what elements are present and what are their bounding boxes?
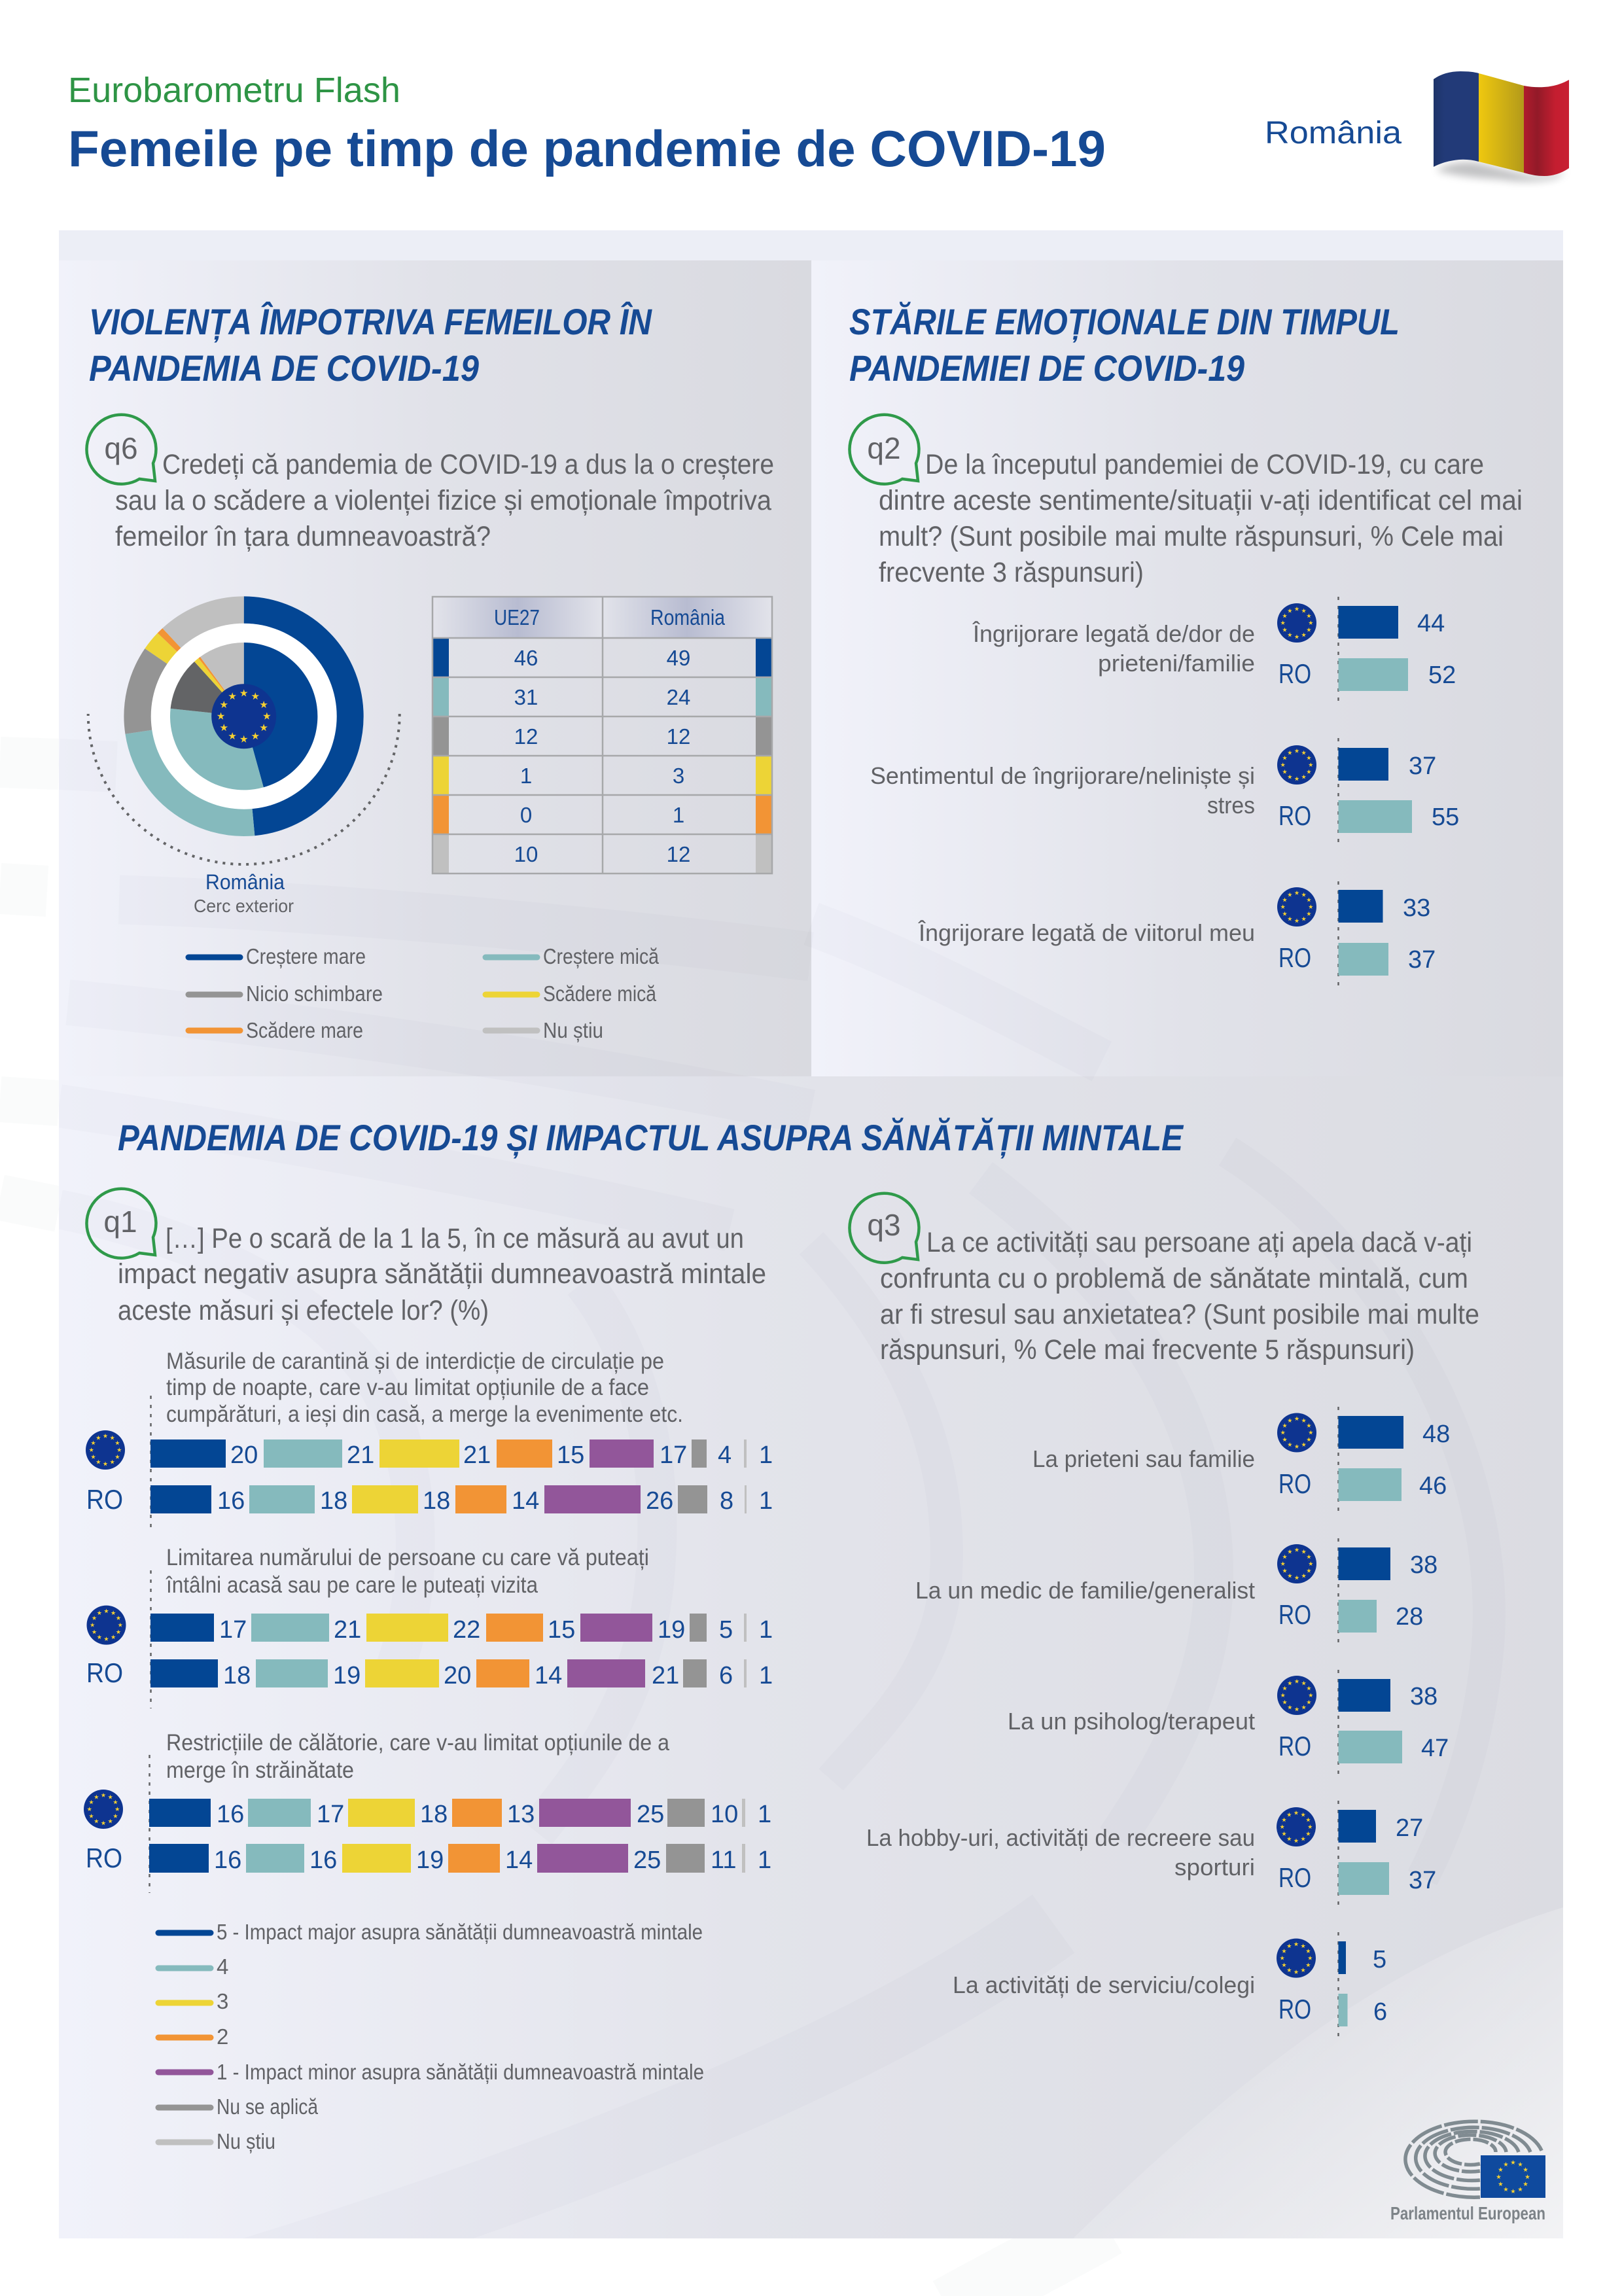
stacked bars: quarantine: 1: [759, 1441, 773, 1469]
data table: 24: [667, 685, 690, 709]
panel background: violence: [59, 260, 811, 1076]
stacked bars: limited visitors: 19: [658, 1616, 685, 1644]
stacked bars: quarantine: [86, 1349, 773, 1533]
legend: q1: Nu știu: [217, 2129, 275, 2153]
bar chart: hobbies: sporturi: [1174, 1854, 1255, 1881]
data table: UE27: [494, 605, 540, 629]
icon: q2 bubble: [849, 415, 919, 484]
question q3: confrunta cu o problemă de sănătate mintală, cum: [880, 1263, 1468, 1294]
data table: [432, 597, 772, 874]
heading: emotional states: [849, 301, 1400, 389]
data table: 12: [667, 724, 690, 749]
bar chart: hobbies: La hobby-uri, activități de recreere sau: [866, 1824, 1255, 1851]
bar chart: hobbies: RO: [1278, 1862, 1311, 1893]
legend: q6: Creștere mică: [543, 944, 660, 968]
stacked bars: travel restrictions: 1: [758, 1846, 771, 1874]
bar chart: q2 item 1: Îngrijorare legată de/dor de: [972, 620, 1255, 647]
icon: q3 bubble: [849, 1193, 919, 1263]
stacked bars: travel restrictions: 1: [758, 1801, 771, 1828]
bar chart: family doctor: 38: [1410, 1551, 1437, 1579]
bar chart: hobbies: 27: [1396, 1814, 1423, 1842]
panel: emotional states: [849, 301, 1523, 987]
question q6: [115, 449, 774, 552]
country name: România: [1265, 116, 1402, 150]
stacked bars: quarantine: 1: [759, 1487, 773, 1515]
panel background: mental health: [59, 1076, 1563, 2238]
data table: 49: [667, 646, 690, 670]
icon: EU flag centre: [211, 684, 276, 749]
bar chart: family doctor: RO: [1278, 1599, 1311, 1630]
main title: Femeile pe timp de pandemie de COVID-19: [68, 120, 1106, 177]
outer ring: România: [137, 610, 350, 822]
bar chart: work: [953, 1932, 1387, 2038]
stacked bars: quarantine: 18: [423, 1487, 450, 1515]
stacked bars: limited visitors: 17: [219, 1616, 247, 1644]
stacked bars: quarantine: 26: [646, 1487, 673, 1515]
stacked bars: limited visitors: 18: [223, 1662, 251, 1689]
bar chart: q2 item 1: 44: [1417, 610, 1445, 637]
bar chart: friends or family: La prieteni sau familie: [1032, 1445, 1255, 1472]
stacked bars: travel restrictions: [84, 1730, 771, 1893]
icon: q2 bubble: q2: [867, 431, 901, 465]
stacked bars: quarantine: 4: [718, 1441, 732, 1469]
stacked bars: quarantine: 20: [230, 1441, 258, 1469]
data table: 31: [514, 685, 538, 709]
bar chart: q2 item 1: prieteni/familie: [1098, 650, 1255, 677]
question q3: La ce activități sau persoane ați apela dacă v-ați: [926, 1227, 1472, 1258]
legend: q6: Nicio schimbare: [246, 981, 383, 1006]
logo: European Parliament: [1390, 2121, 1545, 2223]
icon: Romanian flag: [1434, 71, 1569, 182]
lighter lower-right corner: [1073, 1907, 1563, 2238]
stacked bars: quarantine: RO: [86, 1484, 123, 1515]
bar chart: psychologist: [1008, 1670, 1449, 1775]
inner ring: EU27: [244, 643, 317, 787]
icon: EU flag rectangle: [1481, 2155, 1545, 2198]
stacked bars: quarantine: 15: [557, 1441, 584, 1469]
legend: q6: Creștere mare: [246, 944, 366, 968]
question q1: impact negativ asupra sănătății dumneavoastră mintale: [118, 1258, 766, 1290]
legend: q6: [188, 944, 660, 1042]
donut label: [194, 870, 294, 916]
question q6: femeilor în țara dumneavoastră?: [115, 521, 491, 552]
logo wordmark: Parlamentul European: [1390, 2203, 1545, 2223]
bar chart: q2 item 2: 37: [1409, 752, 1436, 780]
eyebrow title: Eurobarometru Flash: [68, 71, 400, 110]
question q2: dintre aceste sentimente/situații v-ați identificat cel mai: [879, 485, 1523, 516]
legend: q6: Scădere mică: [543, 981, 657, 1006]
bar chart: work: 6: [1373, 1998, 1387, 2026]
stacked bars: quarantine: 18: [320, 1487, 347, 1515]
question q2: frecvente 3 răspunsuri): [879, 557, 1144, 588]
stacked bars: travel restrictions: 16: [214, 1846, 241, 1874]
question q1: […] Pe o scară de la 1 la 5, în ce măsură au avut un: [166, 1223, 744, 1254]
panel background: emotional states: [811, 260, 1563, 1076]
stacked bars: limited visitors: 20: [444, 1662, 471, 1689]
data table: 12: [667, 842, 690, 866]
heading: emotional states: STĂRILE EMOȚIONALE DIN TIMPUL: [849, 301, 1400, 343]
question q3: [880, 1227, 1479, 1366]
stacked bars: travel restrictions: RO: [86, 1843, 122, 1873]
question q3: răspunsuri, % Cele mai frecvente 5 răspunsuri): [880, 1334, 1415, 1366]
bar chart: q2 item 3: 33: [1403, 894, 1430, 922]
heading: violence: PANDEMIA DE COVID-19: [89, 347, 479, 389]
bar chart: q2 item 3: Îngrijorare legată de viitorul meu: [918, 919, 1255, 946]
stacked bars: quarantine: timp de noapte, care v-au limitat opțiunile de a face: [166, 1375, 649, 1400]
stacked bars: travel restrictions: 25: [633, 1846, 661, 1874]
data table: 46: [514, 646, 538, 670]
bar chart: q2 item 2: Sentimentul de îngrijorare/neliniște și: [870, 762, 1255, 789]
legend: q1: 5 - Impact major asupra sănătății dumneavoastră mintale: [217, 1920, 703, 1944]
bar chart: psychologist: La un psiholog/terapeut: [1008, 1708, 1255, 1735]
stacked bars: limited visitors: întâlni acasă sau pe care le puteați vizita: [166, 1572, 538, 1598]
icon: q6 bubble: q6: [104, 431, 138, 465]
data table: România: [650, 605, 726, 629]
question q1: aceste măsuri și efectele lor? (%): [118, 1295, 489, 1326]
stacked bars: limited visitors: 19: [333, 1662, 361, 1689]
stacked bars: travel restrictions: 13: [507, 1801, 535, 1828]
stacked bars: quarantine: cumpărături, a ieși din casă, a merge la evenimente etc.: [166, 1402, 683, 1427]
bar chart: psychologist: RO: [1278, 1731, 1311, 1761]
bar chart: hobbies: 37: [1409, 1867, 1436, 1894]
bar chart: friends or family: [1032, 1407, 1450, 1513]
data table: 1: [673, 803, 684, 827]
bar chart: hobbies: [866, 1801, 1436, 1905]
question q2: [879, 449, 1523, 588]
legend: q6: Nu știu: [543, 1018, 603, 1042]
stacked bars: quarantine: 14: [512, 1487, 539, 1515]
stacked bars: travel restrictions: 19: [416, 1846, 444, 1874]
bar chart: q2 item 3: 37: [1408, 946, 1436, 974]
bar chart: work: RO: [1278, 1994, 1311, 2024]
bar chart: friends or family: 48: [1422, 1421, 1450, 1448]
bar chart: q2 item 1: [972, 597, 1456, 703]
stacked bars: limited visitors: 14: [535, 1662, 562, 1689]
stacked bars: travel restrictions: 16: [217, 1801, 244, 1828]
stacked bars: travel restrictions: 11: [711, 1846, 736, 1874]
heading: mental health: PANDEMIA DE COVID-19 ȘI IMPACTUL ASUPRA SĂNĂTĂȚII MINTALE: [118, 1117, 1184, 1159]
icon: q1 bubble: [86, 1189, 156, 1258]
stacked bars: travel restrictions: 16: [309, 1846, 337, 1874]
stacked bars: travel restrictions: 17: [317, 1801, 344, 1828]
bar chart: family doctor: 28: [1396, 1603, 1423, 1631]
bar chart: q2 item 3: [918, 881, 1436, 987]
legend: q1: [158, 1920, 704, 2153]
data table: 0: [520, 803, 532, 827]
legend: q1: 4: [217, 1954, 228, 1979]
legend: q1: 2: [217, 2024, 228, 2049]
bar chart: psychologist: 38: [1410, 1683, 1437, 1710]
icon: q3 bubble: q3: [867, 1208, 901, 1242]
heading: emotional states: PANDEMIEI DE COVID-19: [849, 347, 1244, 389]
heading: violence: [89, 301, 652, 389]
stacked bars: quarantine: 8: [720, 1487, 733, 1515]
data table: 10: [514, 842, 538, 866]
bar chart: family doctor: La un medic de familie/generalist: [915, 1577, 1255, 1604]
stacked bars: travel restrictions: 25: [637, 1801, 664, 1828]
stacked bars: quarantine: 16: [217, 1487, 245, 1515]
question q2: De la începutul pandemiei de COVID-19, cu care: [925, 449, 1484, 480]
bar chart: q2 item 1: RO: [1278, 658, 1311, 689]
stacked bars: limited visitors: 15: [548, 1616, 575, 1644]
stacked bars: limited visitors: 6: [719, 1662, 733, 1689]
stacked bars: limited visitors: 21: [652, 1662, 679, 1689]
stacked bars: limited visitors: RO: [86, 1657, 123, 1688]
panel: q3 where to seek help: [849, 1193, 1479, 2038]
question q1: [118, 1223, 766, 1326]
stacked bars: quarantine: Măsurile de carantină și de interdicție de circulație pe: [166, 1349, 664, 1374]
bar chart: friends or family: 46: [1419, 1472, 1447, 1500]
stacked bars: limited visitors: Limitarea numărului de persoane cu care vă puteați: [166, 1545, 649, 1570]
panel: q1 measures impact: [84, 1189, 773, 2153]
stacked bars: travel restrictions: merge în străinătate: [166, 1757, 354, 1783]
stacked bars: quarantine: 17: [660, 1441, 687, 1469]
stacked bars: quarantine: 21: [347, 1441, 374, 1469]
legend: q1: Nu se aplică: [217, 2094, 319, 2119]
donut label: România: [205, 870, 285, 894]
bar chart: q2 item 2: 55: [1432, 804, 1459, 831]
stacked bars: limited visitors: 1: [759, 1662, 773, 1689]
legend: q1: 1 - Impact minor asupra sănătății dumneavoastră mintale: [217, 2060, 704, 2084]
legend: q1: 3: [217, 1989, 228, 2013]
stacked bars: limited visitors: 22: [453, 1616, 480, 1644]
bar chart: friends or family: RO: [1278, 1468, 1311, 1499]
bar chart: q2 item 2: stres: [1207, 792, 1255, 819]
data table: 12: [514, 724, 538, 749]
bar chart: work: 5: [1373, 1946, 1386, 1973]
bar chart: q2 item 2: RO: [1278, 800, 1311, 831]
bar chart: work: La activități de serviciu/colegi: [953, 1971, 1255, 1998]
icon: q6 bubble: [86, 415, 156, 484]
bar chart: q2 item 3: RO: [1278, 942, 1311, 973]
stacked bars: travel restrictions: Restricțiile de călătorie, care v-au limitat opțiunile de a: [166, 1730, 669, 1756]
stacked bars: travel restrictions: 18: [420, 1801, 448, 1828]
bar chart: q2 item 1: 52: [1428, 662, 1456, 689]
stacked bars: limited visitors: 21: [334, 1616, 361, 1644]
stacked bars: travel restrictions: 14: [505, 1846, 533, 1874]
icon: q1 bubble: q1: [103, 1205, 137, 1239]
bar chart: family doctor: [915, 1538, 1437, 1644]
stacked bars: limited visitors: 5: [719, 1616, 733, 1644]
top strip of main panel: [59, 230, 1563, 260]
bar chart: psychologist: 47: [1421, 1735, 1449, 1762]
legend: q6: Scădere mare: [246, 1018, 363, 1042]
question q6: Credeți că pandemia de COVID-19 a dus la o creștere: [162, 449, 774, 480]
question q2: mult? (Sunt posibile mai multe răspunsuri, % Cele mai: [879, 521, 1504, 552]
question q6: sau la o scădere a violenței fizice și emoționale împotriva: [115, 485, 771, 516]
donut label: Cerc exterior: [194, 896, 294, 916]
donut chart: [88, 610, 400, 864]
icon: hemicycle: [1405, 2121, 1542, 2197]
data table: 3: [673, 764, 684, 788]
question q3: ar fi stresul sau anxietatea? (Sunt posibile mai multe: [880, 1299, 1479, 1330]
bar chart: q2 item 2: [870, 738, 1459, 845]
stacked bars: limited visitors: [86, 1545, 773, 1708]
data table: 1: [520, 764, 532, 788]
panel: violence against women: [86, 301, 774, 1042]
stacked bars: quarantine: 21: [463, 1441, 491, 1469]
heading: violence: VIOLENȚA ÎMPOTRIVA FEMEILOR ÎN: [89, 301, 652, 343]
stacked bars: limited visitors: 1: [759, 1616, 773, 1644]
stacked bars: travel restrictions: 10: [711, 1801, 738, 1828]
